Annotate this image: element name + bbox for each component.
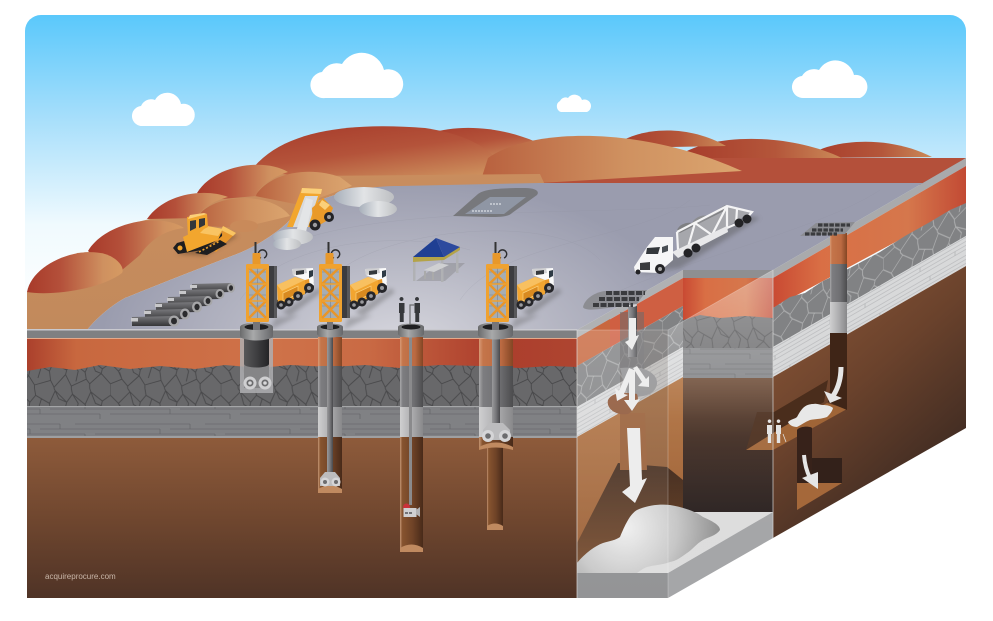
pipe 1 [131,316,180,326]
drill rig 1 [246,242,300,330]
sediment pile in stope [788,404,833,427]
tan base ground [27,170,545,330]
bulldozer [173,213,238,256]
table [424,263,449,272]
right: brown earth [773,266,966,538]
cutter head [320,472,340,486]
body [183,226,223,252]
floor top [577,512,773,573]
paste fill mound [577,505,720,573]
marquee tent [413,238,465,282]
worker 2 [776,419,781,443]
glass overlay over cutaway [577,270,773,598]
right face of ground [773,158,966,538]
arrow: centre branch [624,370,640,411]
backfilled stope with sediment pile [577,463,720,573]
pit back wall [683,270,773,512]
cloud: large centre [310,53,403,98]
shaft 1: casing with drill [240,322,273,393]
cloud: small centre [557,95,591,112]
blade [208,226,236,252]
drill rig 2 [319,242,373,330]
right: strata layer [773,236,966,377]
shaft bands [400,337,423,366]
cab [187,214,208,237]
trailer deck [672,226,728,258]
left hills [27,165,545,330]
falling material [296,198,313,232]
front: rock layer [27,365,577,407]
raise: brown [828,333,847,410]
left grate shaft pipe [620,303,644,368]
collar ring [398,324,424,338]
plateau surface [87,158,966,330]
front: orange soil [27,338,577,372]
shaft bands [318,337,342,366]
right: orange soil [773,166,966,308]
raise: orange [830,233,847,264]
trailer panel backing [677,206,750,250]
cable [409,335,412,505]
worker left [399,297,404,322]
stone piles near dump truck [273,229,313,250]
collar ring [478,322,513,340]
brown cavity [608,393,638,414]
shaft column [620,312,644,368]
lower floor [797,483,842,510]
rock chamber and cavity at shaft base [608,367,657,414]
glass front pane [577,330,668,598]
arrow: into lower drift [802,455,818,489]
casing body [240,338,273,393]
trailer truss [677,206,752,250]
back wall: strata layer [683,348,773,378]
dump truck tipping [287,188,334,232]
drill pipe [327,335,333,472]
grate at right shaft [800,222,855,236]
near track [195,240,227,255]
underground workings on right [746,233,847,510]
shaft 3: inspection camera [398,324,424,552]
dark drill cylinder [244,335,269,368]
stockpiled pipes [131,283,235,326]
brown channel from chamber to stope [620,413,647,470]
collar ring [240,322,273,340]
stope cave [577,463,683,573]
truck body [312,198,333,229]
back wall: lip [683,270,773,278]
arrow: right branch [633,366,649,387]
worker right with pole [414,297,420,322]
right: lip [773,158,966,278]
drill pipe [492,337,500,424]
grey chamber [620,367,657,397]
cutter head [482,423,511,442]
wheels [310,220,320,230]
stope floor [746,403,847,450]
lower connecting shaft [797,427,842,510]
slab side [668,512,773,598]
far track [173,231,223,254]
inner column shade [620,330,668,470]
shaft bands [479,339,513,366]
cut wall inside glass section [577,270,683,573]
raised tray [287,188,322,227]
cut wall: orange [577,278,683,366]
small mound [230,220,258,232]
trailer wheels [684,214,752,258]
pipe 4 [167,296,212,307]
grate at left shaft [583,290,647,310]
shaft 2: drilling deep [317,322,343,493]
workers in stope [767,419,786,443]
service truck 3 [516,268,562,316]
front: strata layer [27,407,577,437]
collar ring [317,324,343,338]
pit floor slab [577,512,773,598]
camera unit [403,504,420,517]
worker 1 [767,419,772,443]
stope back wall [746,380,828,450]
drop shaft [797,427,812,483]
tent valance [413,247,460,262]
back wall: rock layer [683,315,773,348]
clouds [132,53,867,126]
back wall: deep brown [683,378,773,512]
lower pilot hole [487,445,503,526]
right: rock layer [773,203,966,347]
shaft 4: reaming out [478,322,513,530]
cloud: right [792,60,867,98]
pipe 3 [155,302,202,313]
flow arrows in backfill shaft [615,318,649,503]
slab front [577,573,668,598]
pipe [628,305,637,357]
service truck 1 [276,268,322,316]
arrow: down pipe [625,318,639,350]
arrow: into upper stope [824,367,842,403]
arrow: left branch [615,368,634,401]
cut wall: strata [577,347,683,437]
hill: red strip behind plateau [500,158,966,185]
website credit: acquireprocure.com [45,572,116,581]
pipes on trailer [677,205,728,233]
raise: light grey [830,302,847,333]
front: lip [27,330,577,338]
semi truck with truss trailer [634,205,760,274]
ream bottom lip [479,442,513,450]
sky [25,15,966,315]
raise: dark grey [830,264,847,302]
side drift [812,458,842,483]
shaft bottom [318,486,342,493]
drill rig 3 [486,242,540,330]
settling pond [453,188,538,217]
truck cab [634,237,673,273]
tent roof [413,238,444,257]
vertical raise shaft [828,233,847,410]
cut wall: lip [577,270,683,338]
cloud: far left [132,93,195,126]
site workers on surface [399,297,420,324]
cut wall: rock [577,306,683,407]
front face of ground [27,329,577,598]
cab wheels [655,264,665,274]
front: brown earth [27,438,577,598]
vehicle tracks on surface [240,190,880,300]
back wall: orange layer [683,278,773,320]
tent legs [413,250,458,282]
service truck 2 [350,268,395,316]
stone piles at back [334,187,397,217]
glass side pane [668,270,773,598]
arrow: large down to stope [622,428,647,503]
pipe 2 [144,308,190,320]
pipe 5 [179,289,224,300]
cut wall: brown [577,377,683,573]
pipe 6 [190,283,235,293]
shaft bottom [400,544,423,552]
back hill range [250,126,966,190]
cutter wheels [244,376,272,390]
